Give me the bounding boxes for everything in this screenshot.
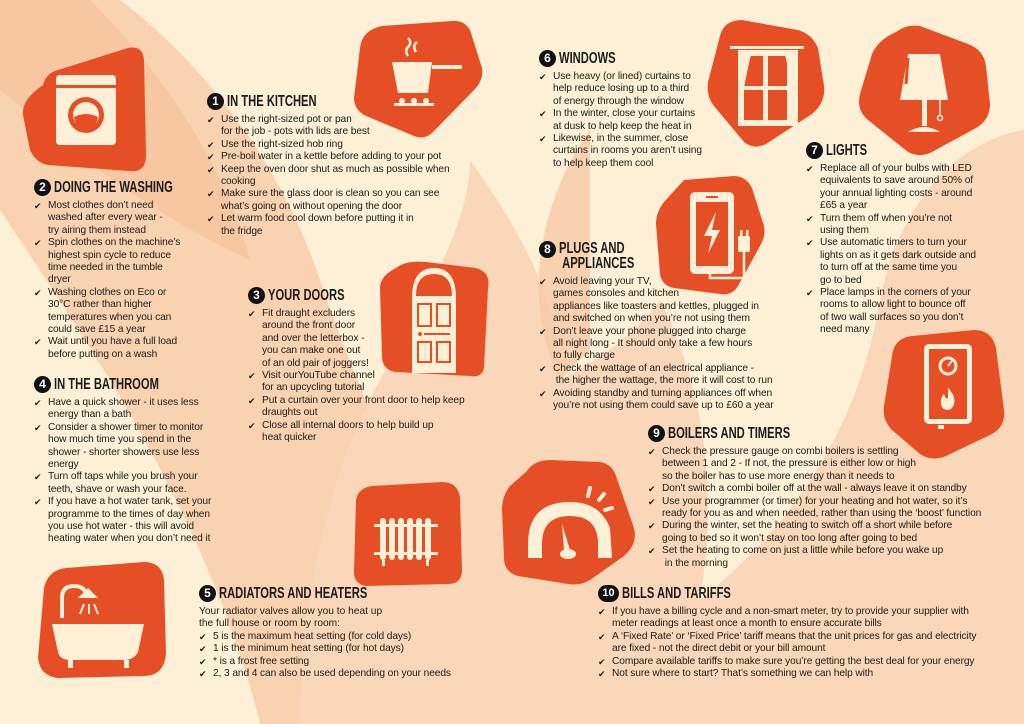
section: bills and tariffs [598, 585, 976, 679]
heading: radiators and heaters: 5 [204, 586, 211, 600]
section: kitchen [207, 93, 450, 237]
section: washing: highest spin cycle to reduce [48, 250, 171, 261]
section: bathroom: heating water when you don’t need it [48, 533, 210, 544]
section: bathroom [34, 376, 212, 544]
section: doors: heat quicker [262, 432, 316, 443]
section: bills and tariffs: Not sure where to start? That’s something we can help with [612, 668, 873, 679]
section: bills and tariffs: A ‘Fixed Rate’ or ‘Fixed Price’ tariff means that the unit prices for gas and electricity [612, 631, 976, 642]
section: kitchen: the fridge [221, 226, 262, 237]
section: boilers and timers: between 1 and 2 - If not, the pressure is either low or high [662, 458, 916, 469]
section: doors: Fit draught excluders [262, 308, 355, 319]
section: washing: Washing clothes on Eco or [48, 287, 166, 298]
section: washing: before putting on a wash [48, 349, 157, 360]
icon: bath [38, 562, 166, 678]
section: kitchen: Keep the oven door shut as much as possible when [221, 164, 450, 175]
section: bathroom: Turn off taps while you brush your [48, 471, 198, 482]
section: bathroom: shower - shorter showers use less [48, 447, 199, 458]
section: bathroom: Have a quick shower - it uses less [48, 397, 199, 408]
section: doors: you can make one out [262, 345, 360, 356]
heading: in the bathroom: 4 [39, 377, 46, 391]
section: radiators [199, 585, 451, 679]
section: doors: Visit ourYouTube channel [262, 370, 375, 381]
section: washing: dryer [48, 274, 71, 285]
heading: your doors: YOUR DOORS [268, 287, 345, 304]
heading: lights: 7 [811, 143, 818, 157]
icon: window [708, 20, 824, 147]
section: washing: time needed in the tumble [48, 262, 163, 273]
section: bathroom: If you have a hot water tank, set your [48, 496, 211, 507]
icon: phone charging [656, 176, 764, 294]
section: lights: Place lamps in the corners of your [820, 287, 971, 298]
section: boilers and timers: going to bed so it won’t stay on too long after going to bed [662, 533, 917, 544]
section: plugs and appliances: Check the wattage of an electrical appliance - [553, 363, 754, 374]
section: bathroom: energy than a bath [48, 409, 131, 420]
section: lights: of two wall surfaces so you don’t [820, 312, 963, 323]
section: lights: £65 a year [820, 200, 867, 211]
section: plugs and appliances: appliances like toasters and kettles, plugged in [553, 301, 759, 312]
section: bathroom: Consider a shower timer to monitor [48, 422, 203, 433]
section: boilers and timers: in the morning [665, 558, 728, 569]
section: washing: washed after every wear - [48, 212, 163, 223]
section: plugs and appliances: games consoles and kitchen [553, 288, 679, 299]
section: lights: lights on as it gets dark outside and [820, 250, 976, 261]
section: bills and tariffs: If you have a billing cycle and a non-smart meter, try to provide your supplier with [612, 606, 969, 617]
section: plugs and appliances: the higher the wattage, the more it will cost to run [556, 375, 773, 386]
section: windows: Likewise, in the summer, close [553, 133, 688, 144]
section: bills and tariffs: Compare available tariffs to make sure you’re getting the best deal for your energy [612, 656, 974, 667]
section: boilers and timers: so the boiler has to use more energy than it needs to [662, 471, 895, 482]
section: lights [806, 142, 976, 335]
section: radiators: * is a frost free setting [213, 656, 309, 667]
section: doors: draughts out [262, 407, 317, 418]
heading: in the kitchen: 1 [212, 94, 219, 108]
section: doors: for an upcycling tutorial [262, 382, 364, 393]
section: doors [248, 287, 465, 443]
section: washing: temperatures when you can [48, 312, 171, 323]
section: washing: could save £15 a year [48, 324, 146, 335]
section: lights: your annual lighting costs - around [820, 188, 972, 199]
section: lights: equivalents to save around 50% of [820, 175, 973, 186]
section: lights: Turn them off when you’re not [820, 213, 952, 224]
section: boilers and timers: ready for you as and when needed, rather than using the ‘boost’ function [662, 508, 981, 519]
section: bills and tariffs: meter readings at least once a month to ensure accurate bills [612, 618, 882, 629]
heading: plugs and appliances [539, 240, 634, 272]
section: windows: curtains in rooms you aren’t using [553, 145, 702, 156]
section: washing: Most clothes don’t need [48, 200, 153, 211]
heading: in the kitchen: IN THE KITCHEN [227, 93, 317, 110]
section: windows [539, 50, 702, 169]
section: kitchen: for the job - pots with lids are best [221, 126, 370, 137]
section: bathroom: you use hot water - this will avoid [48, 521, 194, 532]
icon: gauge [502, 460, 635, 584]
section: washing: Spin clothes on the machine’s [48, 237, 180, 248]
icon: radiator [354, 482, 462, 586]
heading: windows: 6 [544, 51, 551, 65]
section: plugs and appliances: all night long - It should only take a few hours [553, 338, 752, 349]
section: doors: Put a curtain over your front door to help keep [262, 395, 465, 406]
section: doors: and over the letterbox - [262, 333, 364, 344]
heading: lights: LIGHTS [826, 142, 867, 159]
section: windows: at dusk to help keep the heat in [553, 121, 691, 132]
heading: plugs and appliances: APPLIANCES [562, 255, 634, 272]
section: doors: around the front door [262, 320, 355, 331]
section: bathroom: teeth, shave or wash your face. [48, 484, 186, 495]
icon: door [380, 262, 488, 376]
section: windows: Use heavy (or lined) curtains to [553, 71, 691, 82]
section: bathroom: energy [48, 459, 79, 470]
section: lights: Replace all of your bulbs with LED [820, 163, 972, 174]
heading: bills and tariffs: BILLS AND TARIFFS [622, 585, 731, 602]
section: kitchen: what’s going on without opening the door [221, 201, 402, 212]
section: plugs and appliances: you’re not using them could save up to £60 a year [553, 400, 774, 411]
section: radiators: the full house or room by room: [199, 618, 340, 629]
section: plugs and appliances: and switched on when you’re not using them [553, 313, 750, 324]
section: boilers and timers: Check the pressure gauge on combi boilers is settling [662, 446, 898, 457]
icon: boiler [884, 330, 1004, 459]
section: washing: try airing them instead [48, 225, 146, 236]
section: plugs and appliances: Avoid leaving your TV, [553, 276, 651, 287]
section: washing: Wait until you have a full load [48, 336, 177, 347]
section: washing [34, 179, 180, 360]
section: kitchen: Make sure the glass door is clean so you can see [221, 188, 439, 199]
heading: windows: WINDOWS [559, 50, 616, 67]
section: plugs and appliances: Don’t leave your phone plugged into charge [553, 326, 746, 337]
icon: cooking pot [354, 20, 482, 138]
section: washing: 30°C rather than higher [48, 299, 152, 310]
heading: doing the washing: 2 [39, 180, 46, 194]
section: doors: Close all internal doors to help build up [262, 420, 433, 431]
heading: boilers and timers: BOILERS AND TIMERS [668, 425, 790, 442]
section: bathroom: how much time you spend in the [48, 434, 191, 445]
section: plugs and appliances: to fully charge [553, 350, 615, 361]
heading: plugs and appliances: 8 [544, 242, 551, 256]
heading: plugs and appliances: PLUGS AND [559, 240, 625, 257]
section: windows: help reduce losing up to a third [553, 83, 689, 94]
section: boilers and timers: Don’t switch a combi boiler off at the wall - always leave it on standby [662, 483, 967, 494]
section: lights: rooms to allow light to bounce off [820, 299, 965, 310]
section: kitchen: Let warm food cool down before putting it in [221, 213, 414, 224]
section: radiators: 1 is the minimum heat setting (for hot days) [213, 643, 404, 654]
section: lights: Use automatic timers to turn your [820, 237, 967, 248]
heading: bills and tariffs: 10 [602, 587, 615, 599]
section: windows: to help keep them cool [553, 158, 653, 169]
section: lights: go to bed [820, 275, 862, 286]
heading: doing the washing: DOING THE WASHING [54, 179, 173, 196]
section: kitchen: Use the right-sized hob ring [221, 139, 343, 150]
section: radiators: 2, 3 and 4 can also be used depending on your needs [213, 668, 451, 679]
section: windows: of energy through the window [553, 96, 684, 107]
section: boilers and timers [648, 425, 981, 569]
section: doors: of an old pair of joggers! [262, 358, 369, 369]
section: bills and tariffs: are fixed - not the direct debit or your bill amount [612, 643, 825, 654]
section: plugs and appliances [539, 240, 774, 411]
section: bathroom: programme to the times of day when [48, 509, 210, 520]
section: kitchen: Pre-boil water in a kettle before adding to your pot [221, 151, 441, 162]
icon: washing machine [22, 48, 146, 172]
heading: lights [806, 142, 867, 159]
section: lights: using them [820, 225, 869, 236]
heading: your doors: 3 [253, 288, 260, 302]
section: lights: need many [820, 324, 870, 335]
section: boilers and timers: During the winter, set the heating to switch off a short while before [662, 520, 952, 531]
section: kitchen: Use the right-sized pot or pan [221, 114, 352, 125]
section: boilers and timers: Set the heating to come on just a little while before you wake up [662, 545, 943, 556]
section: radiators: Your radiator valves allow you to heat up [199, 606, 382, 617]
section: boilers and timers: Use your programmer (or timer) for your heating and hot water, so it’s [662, 496, 967, 507]
heading: in the bathroom: IN THE BATHROOM [54, 376, 159, 393]
icon: lamp [859, 26, 990, 155]
heading: radiators and heaters: RADIATORS AND HEATERS [219, 585, 367, 602]
section: kitchen: cooking [221, 176, 255, 187]
section: lights: to turn off at the same time you [820, 262, 957, 273]
section: plugs and appliances: Avoiding standby and turning appliances off when [553, 388, 772, 399]
section: radiators: 5 is the maximum heat setting (for cold days) [213, 631, 411, 642]
section: windows: In the winter, close your curtains [553, 108, 695, 119]
heading: boilers and timers: 9 [653, 426, 660, 440]
